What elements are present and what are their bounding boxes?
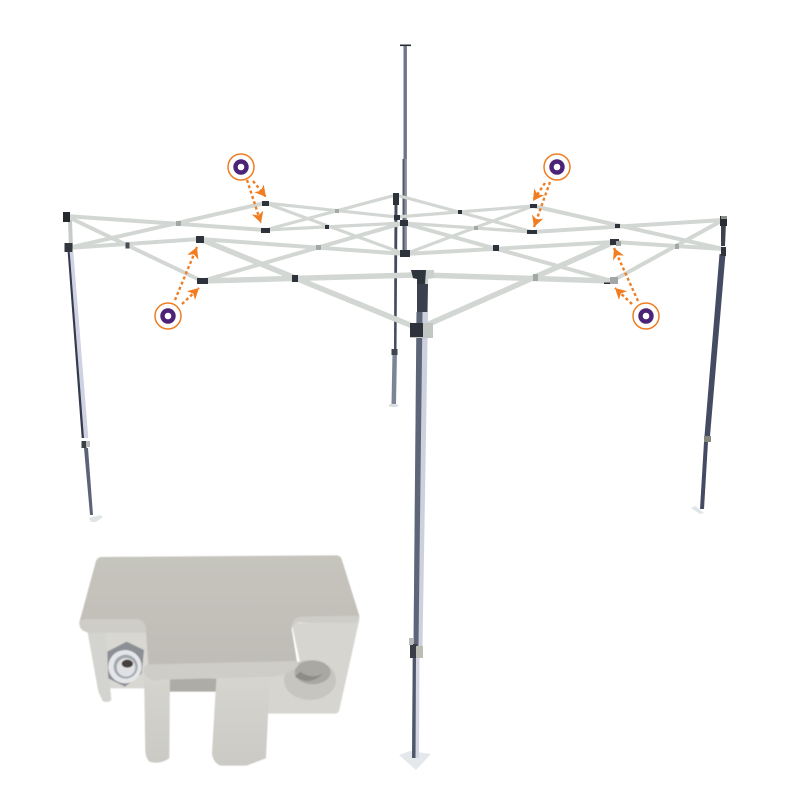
roof truss: back and side beams [66, 195, 723, 327]
left corner pole [63, 212, 103, 522]
bracket: left clip [87, 631, 111, 702]
bracket: legs [144, 670, 270, 766]
bracket: hex nut [107, 642, 144, 687]
right corner pole [691, 216, 727, 514]
callout: top right marker and arrows [533, 154, 570, 227]
bracket: front lip [144, 661, 298, 680]
centre peak pole [400, 44, 411, 251]
bracket: rear wall [105, 630, 150, 688]
bracket: top face [79, 555, 359, 680]
callout: top left marker and arrows [228, 154, 266, 223]
bracket detail [79, 555, 359, 766]
callout: bottom left marker and arrows [155, 247, 199, 329]
back corner pole [388, 200, 398, 407]
front pole: lower section [412, 656, 420, 758]
front pole: upper section [414, 312, 428, 646]
front corner pole [399, 270, 434, 770]
truss joints [126, 193, 679, 284]
bracket: left lip [79, 619, 146, 632]
callout: bottom right marker and arrows [614, 248, 659, 329]
bracket: right face with hole [267, 620, 359, 714]
bracket: right lip [292, 616, 359, 629]
